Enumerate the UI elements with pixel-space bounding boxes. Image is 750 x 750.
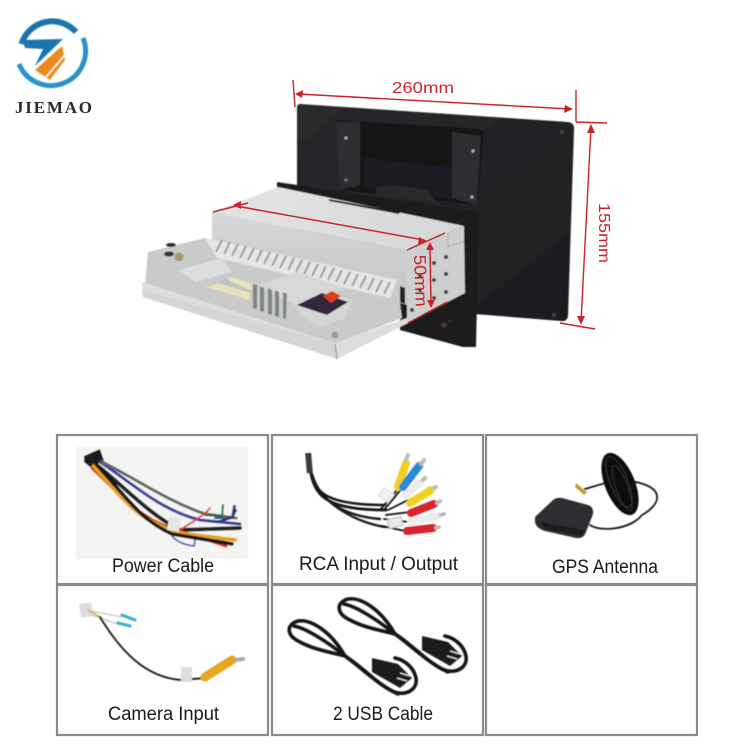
heat fins	[253, 284, 287, 319]
wiring connectors	[206, 277, 252, 300]
camera cable illustration	[79, 602, 243, 682]
dimension lines	[213, 80, 612, 329]
dimension: 50mm height	[410, 242, 435, 308]
chassis rear black body	[277, 182, 478, 347]
dimension: 260mm width	[293, 80, 607, 123]
product photo: head unit	[142, 104, 574, 359]
logo: JIEMAO	[15, 21, 92, 117]
dimension: 50mm height: 50mm	[410, 254, 431, 307]
panel: GPS antenna	[486, 435, 697, 584]
power cable illustration	[76, 447, 248, 559]
caption: Power Cable	[112, 556, 214, 577]
caption: GPS Antenna	[552, 557, 658, 578]
icon: logo ring and mark	[19, 21, 86, 86]
caption: Camera Input	[108, 704, 220, 725]
panel: RCA input output	[272, 435, 483, 584]
dimension: 260mm width: 260mm	[392, 80, 454, 97]
screen back panel	[297, 104, 574, 321]
rear heatsink housing	[142, 238, 408, 359]
RCA cable illustration	[305, 453, 444, 531]
chassis top metal	[212, 187, 464, 305]
accessory grid	[57, 435, 697, 735]
antenna socket	[174, 252, 184, 262]
GPS antenna illustration	[535, 448, 657, 538]
caption: 2 USB Cable	[333, 704, 433, 725]
dimension: 155mm height: 155mm	[595, 203, 612, 263]
cable two	[339, 599, 466, 672]
logo wordmark: JIEMAO	[15, 98, 92, 117]
panel: power cable	[57, 435, 268, 584]
panel: USB cable	[272, 585, 483, 735]
USB cable illustration	[289, 599, 466, 694]
cable one	[289, 621, 416, 694]
chassis side bracket	[400, 226, 465, 323]
panel: camera input	[57, 585, 268, 735]
fuse block	[297, 291, 348, 315]
dimension: 155mm height	[560, 124, 612, 329]
caption: RCA Input / Output	[299, 554, 459, 575]
panel: empty cell	[486, 585, 697, 735]
dimension: depth line	[213, 201, 447, 323]
